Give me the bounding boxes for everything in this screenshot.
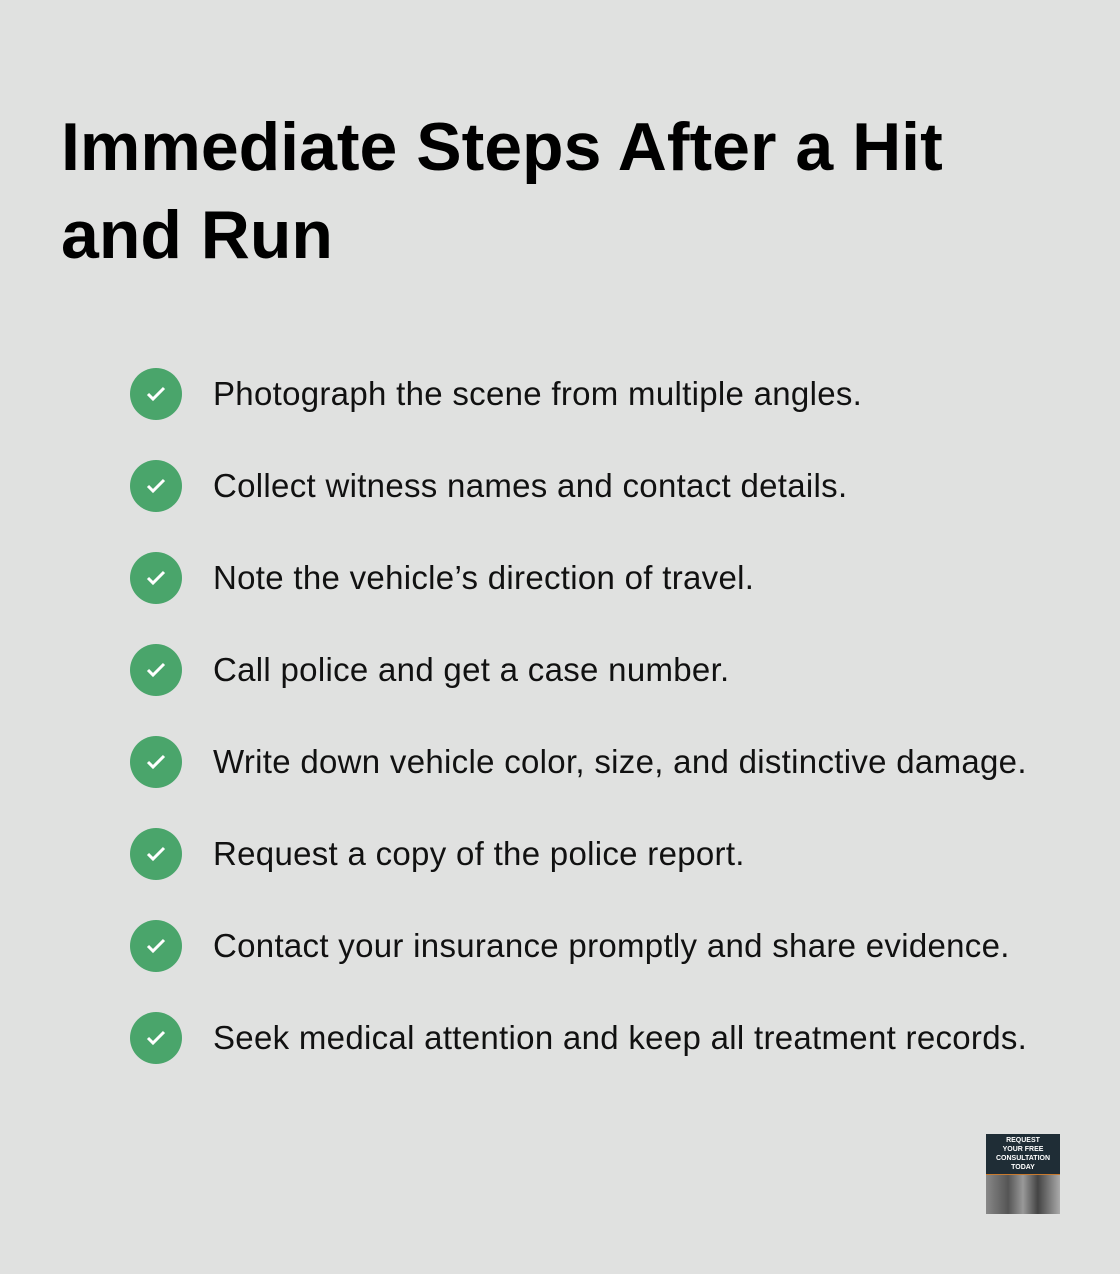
title: Immediate Steps After a Hit (61, 109, 943, 185)
logo: consultation badge (986, 1134, 1060, 1214)
logo: consultation badge: TODAY (1011, 1164, 1035, 1171)
item 4: Call police and get a case number. (213, 651, 730, 688)
item 1 (130, 368, 862, 420)
item 7 (130, 920, 1010, 972)
item 6 (130, 828, 745, 880)
title: and Run (61, 197, 333, 273)
checklist (130, 368, 1027, 1064)
item 2 (130, 460, 847, 512)
item 5: Write down vehicle color, size, and distinctive damage. (213, 743, 1027, 780)
item 6: Request a copy of the police report. (213, 835, 745, 872)
item 8 (130, 1012, 1027, 1064)
logo: consultation badge: REQUEST (1006, 1137, 1040, 1144)
item 1: Photograph the scene from multiple angles. (213, 375, 862, 412)
item 7: Contact your insurance promptly and share evidence. (213, 927, 1010, 964)
item 2: Collect witness names and contact details. (213, 467, 847, 504)
item 3 (130, 552, 754, 604)
item 8: Seek medical attention and keep all treatment records. (213, 1019, 1027, 1056)
logo: consultation badge: YOUR FREE (1003, 1146, 1043, 1153)
item 4 (130, 644, 730, 696)
item 3: Note the vehicle’s direction of travel. (213, 559, 754, 596)
logo: consultation badge: CONSULTATION (996, 1155, 1050, 1162)
item 5 (130, 736, 1027, 788)
title (61, 109, 943, 273)
